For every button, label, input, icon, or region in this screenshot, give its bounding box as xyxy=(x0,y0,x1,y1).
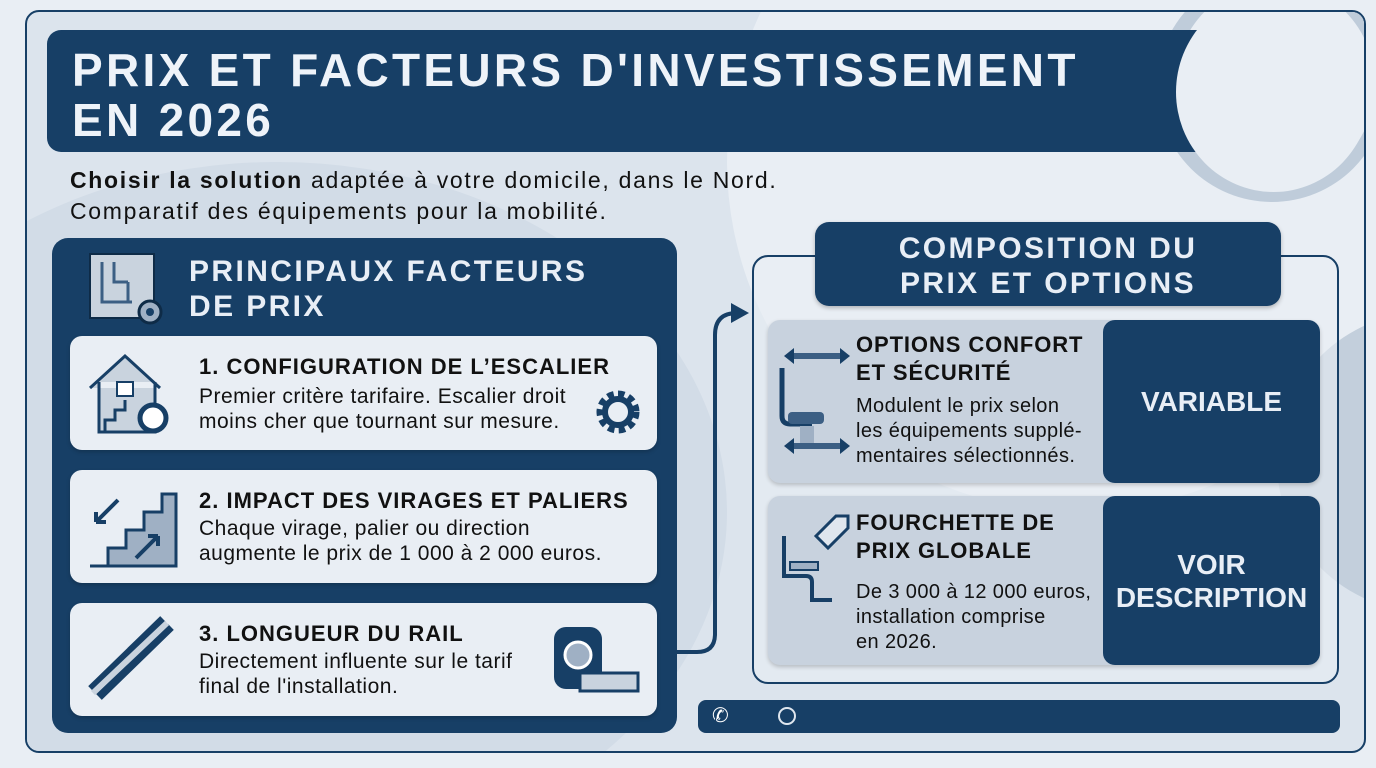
icon: stairs xyxy=(90,492,178,568)
subtitle: Choisir la solution adaptée à votre domicile, dans le Nord. xyxy=(70,167,778,193)
card 1: moins cher que tournant sur mesure. xyxy=(199,410,560,433)
card: fourchette: en 2026. xyxy=(856,631,937,653)
card: options confort: mentaires sélectionnés. xyxy=(856,445,1075,467)
card 3 xyxy=(70,603,657,716)
text: fourchette: FOURCHETTE DE xyxy=(856,510,1055,535)
arrow: connector xyxy=(677,303,749,654)
subtitle: Comparatif des équipements pour la mobilité. xyxy=(70,198,608,224)
heading: composition: COMPOSITION DU xyxy=(899,232,1197,265)
text: options confort xyxy=(856,332,1083,385)
icon: seat price tag xyxy=(782,514,850,602)
icon: phone: ✆ xyxy=(712,705,729,727)
icon: globe xyxy=(778,707,796,725)
value: variable xyxy=(1103,320,1320,483)
card 2: augmente le prix de 1 000 à 2 000 euros. xyxy=(199,542,602,565)
panel heading xyxy=(189,255,587,323)
icon: blueprint xyxy=(89,253,162,324)
card: options confort xyxy=(768,320,1320,483)
card: fourchette: De 3 000 à 12 000 euros, xyxy=(856,581,1091,603)
heading: composition: PRIX ET OPTIONS xyxy=(900,267,1196,300)
card 3 text: 3. LONGUEUR DU RAIL xyxy=(199,621,464,646)
text: fourchette: PRIX GLOBALE xyxy=(856,538,1032,563)
icon: house xyxy=(89,354,168,434)
text: options confort: OPTIONS CONFORT xyxy=(856,332,1083,357)
footer bar xyxy=(698,700,1340,733)
subtitle xyxy=(70,167,778,224)
value: voir description xyxy=(1103,496,1320,665)
card 3: final de l'installation. xyxy=(199,675,398,698)
title banner: PRIX ET FACTEURS D'INVESTISSEMENT xyxy=(72,44,1079,96)
panel heading: PRINCIPAUX FACTEURS xyxy=(189,255,587,288)
text: fourchette xyxy=(856,510,1055,563)
heading: composition xyxy=(815,222,1281,306)
value: variable: VARIABLE xyxy=(1141,386,1282,417)
card 1 xyxy=(70,336,657,450)
icon: gear xyxy=(596,390,640,434)
card 2: Chaque virage, palier ou direction xyxy=(199,517,530,540)
panel heading: DE PRIX xyxy=(189,290,326,323)
icon: tape measure xyxy=(554,627,640,692)
card: fourchette xyxy=(768,496,1320,665)
text: options confort: ET SÉCURITÉ xyxy=(856,360,1011,385)
panel: composition frame xyxy=(752,255,1339,684)
card 2 text: 2. IMPACT DES VIRAGES ET PALIERS xyxy=(199,488,629,513)
card: options confort: les équipements supplé- xyxy=(856,420,1082,442)
panel: principaux facteurs xyxy=(52,238,677,733)
title banner xyxy=(47,30,1227,152)
value: voir description: DESCRIPTION xyxy=(1116,582,1307,612)
card: fourchette: installation comprise xyxy=(856,606,1046,628)
card 1 text: 1. CONFIGURATION DE L’ESCALIER xyxy=(199,354,610,379)
title banner: EN 2026 xyxy=(72,94,274,146)
value: voir description: VOIR xyxy=(1177,548,1246,580)
card 3: Directement influente sur le tarif xyxy=(199,650,512,673)
card 2 xyxy=(70,470,657,583)
card: options confort: Modulent le prix selon xyxy=(856,395,1059,417)
card 1: Premier critère tarifaire. Escalier droit xyxy=(199,385,566,408)
icon: rail xyxy=(88,616,174,700)
icon: seat arrows xyxy=(780,348,850,454)
